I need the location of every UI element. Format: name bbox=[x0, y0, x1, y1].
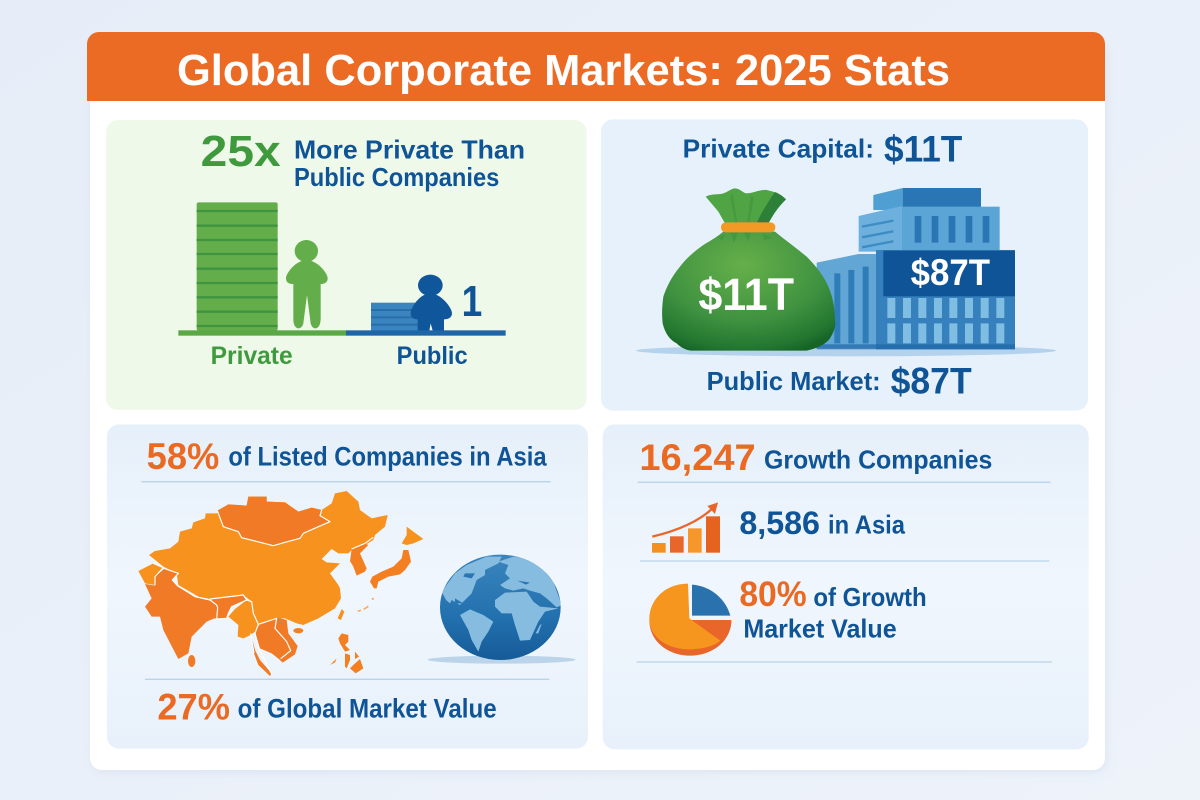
icon: public small bar bbox=[371, 303, 421, 331]
icon: private stacked bar bbox=[197, 202, 278, 331]
panel: private vs public companies bbox=[106, 120, 587, 410]
infographic bbox=[87, 32, 1106, 772]
heading: 58% listed in Asia: 58% bbox=[147, 436, 219, 477]
label: public: Public bbox=[397, 342, 468, 370]
label: $11T on bag: $11T bbox=[698, 269, 794, 320]
baseline bbox=[178, 330, 506, 336]
icon: office building bbox=[817, 188, 1015, 349]
heading: 16,247 growth companies: Growth Companies bbox=[764, 444, 992, 474]
text: 27% of global market value: 27% bbox=[157, 686, 230, 727]
text: 8,586 in Asia: in Asia bbox=[828, 509, 905, 539]
heading: 25x more private: 25x bbox=[201, 128, 281, 176]
text: public market: $87T bbox=[891, 359, 972, 401]
heading: 16,247 growth companies: 16,247 bbox=[639, 437, 756, 478]
panel: listed companies in Asia bbox=[107, 424, 588, 749]
panel: growth companies bbox=[603, 424, 1089, 749]
icon: money bag bbox=[662, 188, 835, 351]
icon: globe bbox=[428, 555, 576, 664]
heading: private capital: Private Capital: bbox=[683, 134, 874, 164]
title: Global Corporate Markets: 2025 Stats bbox=[177, 46, 950, 95]
header banner bbox=[87, 32, 1105, 101]
text: 27% of global market value bbox=[157, 686, 497, 727]
icon: private person bbox=[286, 240, 328, 328]
heading: private capital: $11T bbox=[884, 128, 963, 170]
icon: rising bar chart bbox=[652, 502, 720, 553]
heading: 16,247 growth companies bbox=[639, 437, 992, 478]
white card bbox=[90, 40, 1105, 770]
heading: 58% listed in Asia: of Listed Companies in Asia bbox=[228, 442, 547, 472]
icon: pie chart bbox=[649, 584, 731, 656]
text: 80% of growth market value bbox=[739, 575, 927, 643]
text: 80% of growth market value: 80% bbox=[739, 575, 807, 614]
map: Asia bbox=[138, 491, 423, 676]
heading: 25x more private: Public Companies bbox=[294, 162, 499, 192]
heading: 58% listed in Asia bbox=[147, 436, 547, 477]
text: 27% of global market value: of Global Market Value bbox=[238, 694, 497, 724]
text: 80% of growth market value: Market Value bbox=[743, 613, 897, 643]
label: $87T on building: $87T bbox=[911, 251, 990, 293]
text: 8,586 in Asia bbox=[739, 504, 905, 541]
icon: public person bbox=[411, 275, 452, 331]
text: public market bbox=[707, 359, 972, 401]
number: 1: 1 bbox=[462, 278, 482, 326]
heading: private capital bbox=[683, 128, 963, 170]
ground shadow bbox=[636, 345, 1056, 356]
text: public market: Public Market: bbox=[707, 366, 881, 396]
label: private: Private bbox=[211, 342, 293, 370]
panel: private capital vs public market bbox=[601, 119, 1088, 411]
text: 80% of growth market value: of Growth bbox=[813, 582, 927, 612]
text: 8,586 in Asia: 8,586 bbox=[739, 504, 820, 541]
heading: 25x more private: More Private Than bbox=[294, 134, 525, 164]
heading: 25x more private bbox=[201, 128, 525, 192]
